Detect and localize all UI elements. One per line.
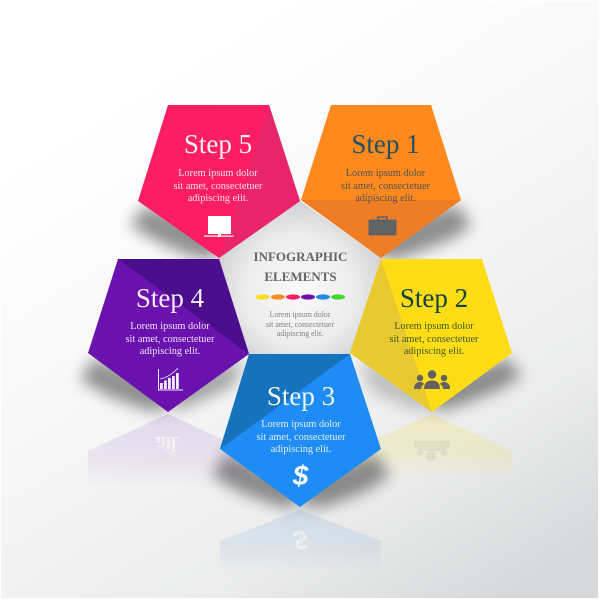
text: step 2: sit amet, consectetuer: [390, 334, 479, 345]
text: step 2: adipiscing elit.: [404, 346, 464, 357]
text: step 5: sit amet, consectetuer: [174, 181, 263, 192]
heading: step 4: Step 4: [136, 283, 205, 313]
text: step 1: sit amet, consectetuer: [341, 181, 431, 192]
reflection: step 3: $: [292, 525, 308, 555]
heading: step 2: Step 2: [400, 283, 468, 313]
icon: dollar: $: [292, 460, 309, 491]
shadow: step 4: [80, 358, 170, 413]
text: step 3: adipiscing elit.: [271, 444, 331, 455]
icon: people: [414, 370, 450, 389]
icon: bar chart: [158, 368, 183, 390]
text: step 2: Lorem ipsum dolor: [394, 321, 474, 332]
text: step 4: [126, 321, 215, 357]
heading: infographic elements: INFOGRAPHIC: [254, 249, 347, 264]
text: step 2: [390, 321, 479, 357]
panel: step 3: [220, 354, 381, 507]
icon: monitor: [204, 216, 234, 237]
heading: infographic elements: ELEMENTS: [264, 269, 337, 284]
text: step 5: Lorem ipsum dolor: [178, 168, 258, 179]
shadow: step 5: [130, 206, 225, 260]
panel: step 5: [138, 105, 300, 258]
heading: step 1: Step 1: [351, 129, 420, 159]
text: step 1: Lorem ipsum dolor: [346, 168, 426, 179]
text: step 3: Lorem ipsum dolor: [261, 419, 341, 430]
panel: step 1: [301, 105, 461, 258]
shadow: step 1: [376, 205, 472, 260]
text: step 4: Lorem ipsum dolor: [130, 321, 210, 332]
reflection: step 4: [88, 414, 249, 488]
panel: step 4: [88, 259, 249, 412]
center text: [266, 310, 334, 338]
panel: center: [218, 201, 381, 354]
text: step 5: [174, 168, 263, 204]
reflection: step 3: [220, 510, 381, 572]
shadow: step 2: [430, 358, 522, 412]
text: step 1: [341, 168, 431, 204]
icon: briefcase: [369, 217, 396, 235]
text: step 4: adipiscing elit.: [140, 346, 200, 357]
center text: Lorem ipsum dolor: [270, 310, 331, 319]
heading: step 3: Step 3: [267, 381, 335, 411]
center text: adipiscing elit.: [277, 329, 323, 338]
text: step 5: adipiscing elit.: [188, 193, 248, 204]
reflection: step 2: [350, 414, 512, 478]
heading: infographic elements: [254, 249, 347, 284]
panel: step 2: [350, 259, 512, 412]
center text: sit amet, consectetuer: [266, 320, 334, 329]
text: step 3: [257, 419, 346, 455]
heading: step 5: Step 5: [184, 129, 252, 159]
shadow: step 3: [212, 453, 300, 509]
text: step 1: adipiscing elit.: [355, 193, 416, 204]
text: step 4: sit amet, consectetuer: [126, 334, 215, 345]
text: step 3: sit amet, consectetuer: [257, 432, 346, 443]
color dots: [256, 294, 345, 300]
